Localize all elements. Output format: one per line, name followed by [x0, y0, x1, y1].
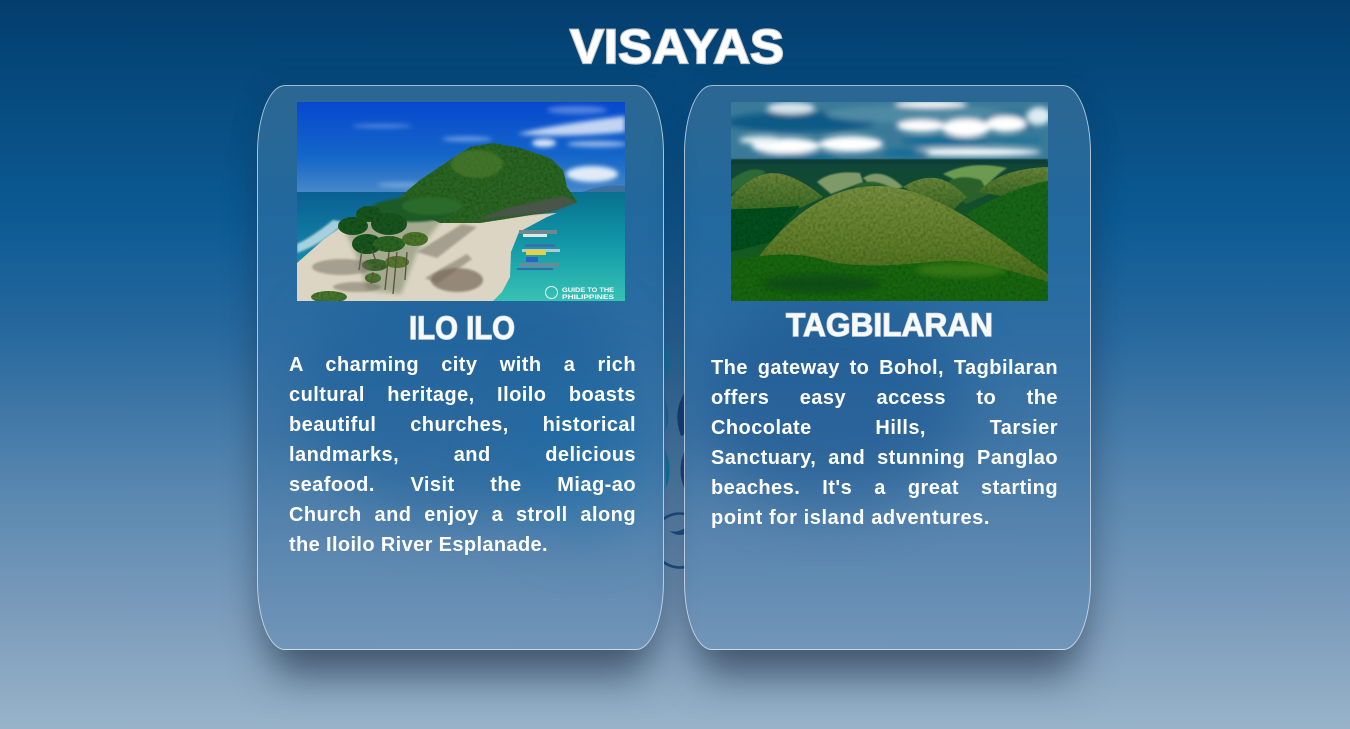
text: Ilo Ilo description: seafood. Visit the Miag-ao: [289, 474, 636, 496]
text: Tagbilaran description: offers easy access to the: [711, 387, 1058, 409]
card shadow left: [257, 85, 664, 650]
photo: Iloilo island beach: [297, 102, 625, 301]
panel: Tagbilaran: [684, 85, 1091, 650]
text: Tagbilaran description: Chocolate Hills, Tarsier: [711, 417, 1058, 439]
text: Tagbilaran description: The gateway to Bohol, Tagbilaran: [711, 357, 1058, 379]
text: Ilo Ilo description: beautiful churches, historical: [289, 414, 636, 436]
heading: Tagbilaran: TAGBILARAN: [786, 307, 993, 343]
logo: [546, 286, 615, 301]
decorative background leaves between the cards: [664, 340, 685, 569]
text: Ilo Ilo description: cultural heritage, Iloilo boasts: [289, 384, 636, 406]
card shadow right: [684, 85, 1091, 650]
text: Tagbilaran description: point for island adventures.: [711, 507, 990, 529]
logo: PHILIPPINES: [562, 294, 615, 301]
photo: Chocolate Hills: [731, 102, 1048, 301]
text: Ilo Ilo description: Church and enjoy a stroll along: [289, 504, 636, 526]
text: Ilo Ilo description: the Iloilo River Esplanade.: [289, 534, 548, 556]
text: Ilo Ilo description: [289, 354, 636, 556]
title: VISAYAS: [570, 21, 784, 74]
text: Tagbilaran description: [711, 357, 1058, 529]
text: Tagbilaran description: beaches. It's a great starting: [711, 477, 1058, 499]
panel: Ilo Ilo: [257, 85, 664, 650]
text: Ilo Ilo description: A charming city with a rich: [289, 354, 636, 376]
text: Tagbilaran description: Sanctuary, and stunning Panglao: [711, 447, 1058, 469]
text: Ilo Ilo description: landmarks, and delicious: [289, 444, 636, 466]
heading: Ilo Ilo: ILO ILO: [409, 310, 515, 346]
logo: GUIDE TO THE: [562, 287, 615, 294]
